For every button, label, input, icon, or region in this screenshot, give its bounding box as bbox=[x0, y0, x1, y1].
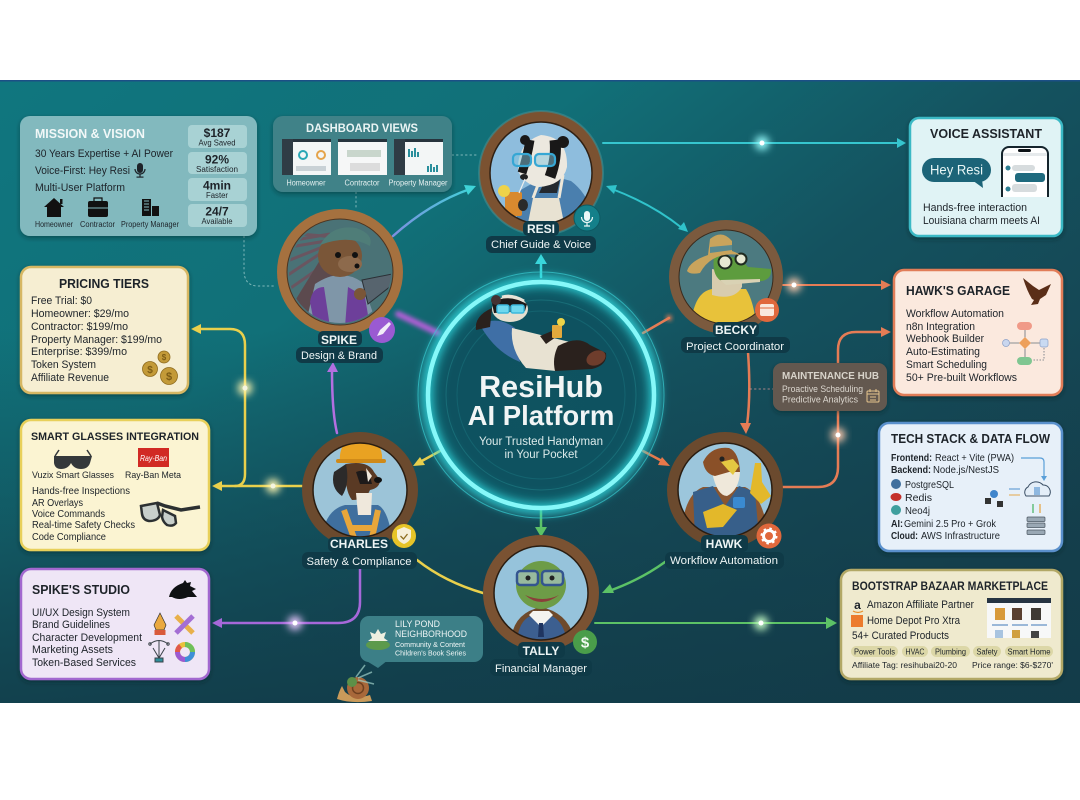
label: Tally: Financial Manager bbox=[495, 663, 587, 675]
pricing list: Homeowner: $29/mo bbox=[31, 308, 129, 320]
voice text: Louisiana charm meets AI bbox=[923, 215, 1040, 227]
icon: coins: $ bbox=[162, 353, 167, 362]
heading: ResiHub AI Platform bbox=[468, 370, 614, 431]
icon: dollar badge: $ bbox=[581, 634, 590, 652]
stack list: Cloud: bbox=[891, 531, 918, 542]
garage list: Smart Scheduling bbox=[906, 359, 987, 371]
stat: faster: Faster bbox=[206, 191, 228, 200]
heading: dashboard: DASHBOARD VIEWS bbox=[306, 121, 418, 135]
dashboard labels: Homeowner bbox=[286, 178, 326, 188]
arrow: Resi and Becky bbox=[606, 185, 688, 232]
arrow: Charles to Pricing bbox=[191, 324, 252, 486]
garage list: Webhook Builder bbox=[906, 333, 984, 345]
stat: satisfaction bbox=[188, 152, 247, 174]
label: Tally: TALLY bbox=[523, 644, 559, 658]
background bbox=[0, 80, 1080, 703]
heading: smart glasses: SMART GLASSES INTEGRATION bbox=[31, 431, 199, 443]
connectors bbox=[191, 136, 906, 630]
thumbnail: homeowner bbox=[282, 139, 331, 175]
thumbnail: store screenshot bbox=[987, 598, 1051, 638]
label: Hawk bbox=[665, 535, 784, 569]
icon: ray-ban logo bbox=[138, 448, 169, 467]
studio list: Brand Guidelines bbox=[32, 619, 110, 631]
icon: colour wheel bbox=[178, 644, 192, 660]
arrow: hub to Hawk bbox=[643, 451, 670, 466]
stat: available: Available bbox=[202, 217, 233, 226]
panel: smart glasses integration bbox=[21, 420, 209, 550]
label: Becky: BECKY bbox=[715, 323, 757, 337]
glasses features: Code Compliance bbox=[32, 532, 106, 543]
glasses labels: Ray-Ban Meta bbox=[125, 469, 182, 480]
icon: coins bbox=[142, 351, 178, 384]
icon: gear badge bbox=[756, 524, 782, 548]
glasses features bbox=[32, 486, 135, 543]
icon: amazon: a bbox=[854, 598, 861, 612]
marketplace list: 54+ Curated Products bbox=[852, 630, 949, 642]
heading: mission: MISSION & VISION bbox=[35, 126, 145, 141]
voice text bbox=[923, 202, 1040, 227]
maintenance text: Proactive Scheduling bbox=[782, 384, 863, 394]
label: Resi: Chief Guide & Voice bbox=[491, 239, 591, 251]
label: Hawk: Workflow Automation bbox=[670, 555, 778, 567]
icon: homeowner bbox=[44, 198, 64, 217]
heading: maintenance: MAINTENANCE HUB bbox=[782, 371, 879, 382]
stack list: Frontend: bbox=[891, 453, 932, 464]
glasses features: Voice Commands bbox=[32, 509, 105, 520]
heading: voice: VOICE ASSISTANT bbox=[930, 127, 1042, 141]
voice text: Hands-free interaction bbox=[923, 202, 1027, 214]
character: Hawk bbox=[667, 432, 783, 548]
dotted links bbox=[244, 155, 773, 389]
garage list: Auto-Estimating bbox=[906, 346, 980, 358]
stat: avg saved: $187 bbox=[204, 126, 231, 140]
heading: tech stack: TECH STACK & DATA FLOW bbox=[891, 432, 1050, 446]
arrow: Charles to Spike bbox=[327, 362, 338, 433]
pills: categories: HVAC bbox=[906, 648, 925, 656]
stack list: PostgreSQL bbox=[905, 480, 954, 491]
callout: hey resi bbox=[922, 158, 991, 188]
stack list: React + Vite (PWA) bbox=[935, 453, 1014, 464]
garage list bbox=[906, 308, 1017, 384]
icon: hawk silhouette bbox=[1023, 278, 1051, 305]
mission text bbox=[35, 148, 173, 194]
icon: dollar badge bbox=[573, 630, 597, 654]
arrow: Tally to Bootstrap Bazaar bbox=[595, 616, 837, 630]
stack list: AWS Infrastructure bbox=[921, 531, 1000, 542]
stack list: Neo4j bbox=[905, 506, 930, 517]
icon: calendar badge bbox=[755, 298, 779, 322]
icon: flowchart bbox=[1002, 322, 1048, 365]
arrow: Resi to Voice Assistant bbox=[603, 136, 906, 150]
pills: categories: Power Tools bbox=[854, 648, 895, 656]
label: Charles bbox=[302, 537, 417, 569]
garage list: Workflow Automation bbox=[906, 308, 1004, 320]
icon: coins: $ bbox=[147, 365, 153, 376]
garage list: n8n Integration bbox=[906, 321, 975, 333]
affiliate footer: Affiliate Tag: resihubai20-20 bbox=[852, 660, 957, 670]
glasses features: Real-time Safety Checks bbox=[32, 520, 135, 531]
mission labels: Property Manager bbox=[121, 220, 179, 229]
icon: postgres redis neo4j bbox=[890, 479, 902, 515]
stack list: Redis bbox=[905, 493, 932, 504]
arrow: hub to Tally bbox=[535, 510, 547, 537]
character: Charles bbox=[302, 432, 418, 548]
pricing list: Token System bbox=[31, 359, 96, 371]
stat: available bbox=[188, 204, 247, 227]
maintenance text bbox=[782, 384, 863, 404]
icon: ray-ban logo: Ray-Ban bbox=[140, 454, 167, 463]
character: Tally bbox=[483, 535, 599, 651]
label: Becky bbox=[681, 322, 790, 353]
arrow: hub to Spike bbox=[398, 314, 438, 333]
studio list: Marketing Assets bbox=[32, 644, 113, 656]
stack list bbox=[891, 453, 1014, 542]
icon: phone bbox=[1001, 146, 1049, 197]
panel: tech stack and data flow bbox=[879, 423, 1062, 551]
panel: voice assistant bbox=[910, 118, 1062, 236]
pills: categories: Safety bbox=[976, 648, 998, 656]
arrow: Charles to Spike's Studio bbox=[212, 569, 360, 630]
glasses labels bbox=[32, 469, 182, 480]
mission text: Multi-User Platform bbox=[35, 182, 125, 194]
mission text: Voice-First: Hey Resi bbox=[35, 165, 130, 177]
diagram: data flow bbox=[985, 458, 1050, 534]
dashboard labels bbox=[286, 178, 448, 188]
stat: available: 24/7 bbox=[205, 204, 229, 218]
icon: porcupine bbox=[169, 580, 197, 599]
affiliate footer: Price range: $6-$270' bbox=[972, 660, 1053, 670]
maintenance text: Predictive Analytics bbox=[782, 394, 858, 404]
icon: calendar bbox=[867, 389, 879, 402]
arrow: Hawk to Tally bbox=[602, 562, 665, 593]
label: Hawk: HAWK bbox=[706, 537, 743, 551]
tagline bbox=[479, 436, 603, 461]
drink bbox=[505, 192, 522, 216]
icon: ruler and pencil bbox=[176, 616, 193, 633]
icon: coins: $ bbox=[166, 371, 172, 383]
label: Resi bbox=[486, 221, 596, 253]
label: Resi: RESI bbox=[527, 222, 555, 236]
icon: snail and dragonfly bbox=[337, 665, 374, 702]
panel: dashboard views bbox=[273, 116, 452, 192]
panel: hawk's garage bbox=[894, 270, 1062, 395]
marketplace list: Amazon Affiliate Partner bbox=[867, 599, 974, 611]
panel: maintenance hub bbox=[773, 363, 887, 411]
mission labels: Contractor bbox=[80, 220, 115, 229]
affiliate footer bbox=[852, 660, 1053, 670]
stat: faster: 4min bbox=[203, 178, 231, 192]
panel: mission and vision bbox=[20, 116, 257, 236]
marketplace list bbox=[852, 599, 974, 642]
stack list: Node.js/NestJS bbox=[933, 465, 999, 476]
arrow: Charles to Smart Glasses bbox=[212, 479, 302, 493]
stack list: Gemini 2.5 Pro + Grok bbox=[904, 519, 997, 530]
character: Becky bbox=[669, 220, 783, 334]
lily text bbox=[395, 619, 467, 658]
icon: bezier pen bbox=[149, 640, 169, 662]
character: Resi bbox=[479, 111, 603, 235]
icon: brush badge bbox=[369, 317, 395, 343]
panel: bootstrap bazaar marketplace bbox=[841, 570, 1062, 679]
marketplace list: Home Depot Pro Xtra bbox=[867, 615, 960, 627]
panel: pricing tiers bbox=[21, 267, 188, 393]
tagline: in Your Pocket bbox=[504, 449, 578, 461]
arrow: Charles to Tally bbox=[417, 560, 483, 593]
glasses labels: Vuzix Smart Glasses bbox=[32, 469, 114, 480]
studio list: Token-Based Services bbox=[32, 657, 136, 669]
heading: marketplace: BOOTSTRAP BAZAAR MARKETPLACE bbox=[852, 581, 1048, 593]
pricing list: Property Manager: $199/mo bbox=[31, 334, 162, 346]
label: Charles: CHARLES bbox=[330, 537, 388, 551]
heading: ResiHub AI Platform: AI Platform bbox=[468, 400, 614, 431]
tagline: Your Trusted Handyman bbox=[479, 436, 603, 448]
icon: vuzix glasses bbox=[54, 450, 92, 469]
mission text: 30 Years Expertise + AI Power bbox=[35, 148, 173, 160]
stat: satisfaction: Satisfaction bbox=[196, 165, 238, 174]
pricing list: Contractor: $199/mo bbox=[31, 321, 128, 333]
label: Becky: Project Coordinator bbox=[686, 341, 784, 353]
pills: categories: Plumbing bbox=[935, 648, 966, 656]
stack list: Backend: bbox=[891, 465, 931, 476]
stat: faster bbox=[188, 178, 247, 201]
pricing list: Affiliate Revenue bbox=[31, 372, 109, 384]
mission labels: Homeowner bbox=[35, 220, 73, 229]
dashboard labels: Contractor bbox=[344, 178, 380, 188]
icon: pen nib bbox=[154, 613, 166, 635]
label: Spike: SPIKE bbox=[321, 333, 357, 347]
panel: lily pond neighborhood bbox=[360, 616, 483, 668]
label: Tally bbox=[490, 642, 592, 676]
central hub bbox=[418, 272, 664, 518]
arrow: hub to Resi bbox=[535, 254, 547, 277]
pricing list: Enterprise: $399/mo bbox=[31, 346, 127, 358]
label: Charles: Safety & Compliance bbox=[306, 556, 412, 568]
label: Spike bbox=[296, 331, 383, 363]
lily text: NEIGHBORHOOD bbox=[395, 629, 467, 639]
glasses features: Hands-free Inspections bbox=[32, 486, 130, 497]
callout: hey resi: Hey Resi bbox=[930, 162, 983, 178]
icon: home depot bbox=[851, 615, 863, 627]
arrow: Becky to Hawk bbox=[740, 352, 751, 434]
character: Spike bbox=[277, 209, 403, 335]
pricing list: Free Trial: $0 bbox=[31, 295, 92, 307]
stat: satisfaction: 92% bbox=[205, 152, 229, 166]
icon: microphone bbox=[135, 163, 145, 178]
studio list bbox=[32, 607, 142, 669]
icon: lounging badger bbox=[476, 295, 608, 371]
mission labels bbox=[35, 220, 179, 229]
heading: ResiHub AI Platform: ResiHub bbox=[479, 370, 603, 404]
arrow: Hawk to Hawk's Garage bbox=[783, 327, 891, 487]
label: Spike: Design & Brand bbox=[301, 350, 377, 362]
lily text: Children's Book Series bbox=[395, 648, 466, 658]
heading: garage: HAWK'S GARAGE bbox=[906, 284, 1010, 298]
stack list: AI: bbox=[891, 519, 903, 530]
lily text: Community & Content bbox=[395, 640, 466, 649]
dashboard labels: Property Manager bbox=[388, 178, 448, 188]
icon: property manager bbox=[142, 199, 159, 216]
pricing list bbox=[31, 295, 162, 384]
icon: water lily bbox=[366, 629, 390, 650]
panel: spike's studio bbox=[21, 569, 209, 679]
icon: smart glasses bbox=[141, 503, 200, 526]
lily text: LILY POND bbox=[395, 619, 440, 629]
pills: categories bbox=[851, 646, 1053, 657]
stat: avg saved: Avg Saved bbox=[198, 138, 236, 148]
icon: contractor bbox=[88, 198, 108, 217]
studio list: UI/UX Design System bbox=[32, 607, 130, 619]
thumbnail: contractor bbox=[338, 139, 387, 175]
icon: amazon bbox=[853, 598, 863, 612]
head bbox=[518, 135, 567, 187]
icon: microphone badge bbox=[574, 205, 600, 231]
heading: pricing: PRICING TIERS bbox=[59, 277, 149, 291]
pills: categories: Smart Home bbox=[1008, 648, 1051, 656]
heading: studio: SPIKE'S STUDIO bbox=[32, 583, 130, 597]
arrow: hub to Becky bbox=[643, 315, 672, 333]
thumbnail: property manager bbox=[394, 139, 443, 175]
glasses features: AR Overlays bbox=[32, 498, 83, 509]
stat: avg saved bbox=[188, 125, 247, 148]
arrow: Becky to Hawk's Garage bbox=[783, 278, 891, 292]
garage list: 50+ Pre-built Workflows bbox=[906, 372, 1017, 384]
icon: shield badge bbox=[392, 524, 416, 548]
arrow: Spike to Resi bbox=[393, 185, 476, 236]
studio list: Character Development bbox=[32, 632, 142, 644]
shirt bbox=[516, 178, 586, 222]
arrow: hub to Charles bbox=[413, 451, 440, 466]
